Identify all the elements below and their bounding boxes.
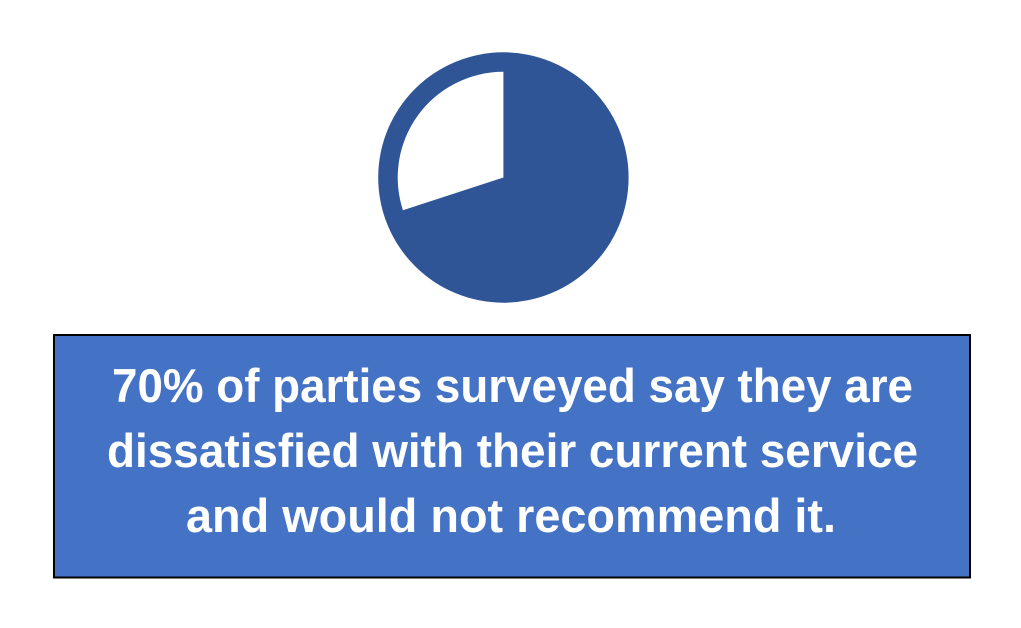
pie chart: 70% filled [378, 52, 629, 303]
callout text: dissatisfied with their current service [107, 424, 918, 477]
callout background [54, 335, 970, 578]
callout text [107, 359, 918, 542]
callout text: and would not recommend it. [186, 489, 836, 542]
pie outer disc [378, 52, 629, 303]
callout text: 70% of parties surveyed say they are [112, 359, 913, 412]
callout box [54, 335, 970, 578]
pie white 30% wedge [398, 72, 503, 210]
